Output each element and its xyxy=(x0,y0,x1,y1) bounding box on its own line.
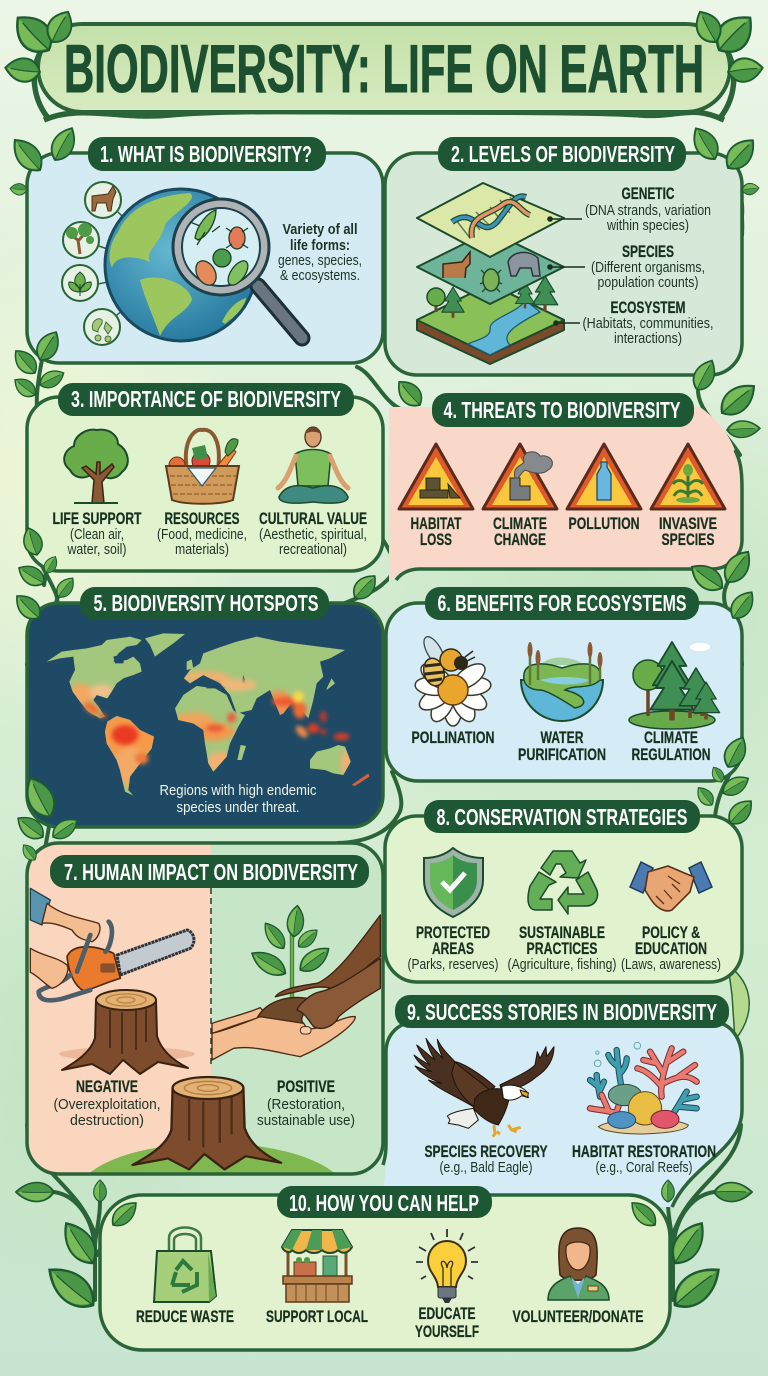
text: map caption: Regions with high endemic xyxy=(160,782,317,799)
split backgrounds xyxy=(28,844,381,1172)
icon: species layer xyxy=(417,231,564,304)
panel card xyxy=(385,153,742,375)
divider xyxy=(210,888,212,1066)
text: benefit labels: PURIFICATION xyxy=(518,746,606,764)
heading xyxy=(80,587,329,620)
text: success labels xyxy=(424,1143,716,1176)
panel card xyxy=(27,153,383,363)
text: threat labels: HABITAT xyxy=(410,514,462,533)
text: threat labels: POLLUTION xyxy=(568,514,640,533)
panel border xyxy=(396,450,742,580)
icon: handshake xyxy=(630,862,712,911)
panel card xyxy=(389,407,742,582)
panel card xyxy=(27,397,383,571)
text: definition: life forms: xyxy=(290,237,350,254)
panel card xyxy=(100,1195,670,1350)
panel 9: success stories in biodiversity xyxy=(380,965,749,1207)
icon: genetic layer xyxy=(417,183,564,257)
text: definition: & ecosystems. xyxy=(280,267,360,284)
heading xyxy=(432,393,694,427)
icon: species circles xyxy=(62,182,130,345)
heading xyxy=(425,587,699,620)
lakes and seas xyxy=(113,653,247,713)
heading: 10. HOW YOU CAN HELP xyxy=(289,1190,479,1216)
text: sustainable practices: (Agriculture, fishing) xyxy=(508,956,616,973)
panel 10: how you can help xyxy=(100,1186,670,1350)
text: negative: destruction) xyxy=(70,1112,144,1129)
panel 6: benefits for ecosystems xyxy=(386,587,742,781)
heading: 2. LEVELS OF BIODIVERSITY xyxy=(451,141,675,167)
icon: seedling in hands xyxy=(212,905,380,1060)
text: positive: sustainable use) xyxy=(257,1112,355,1129)
text: policy and education: (Laws, awareness) xyxy=(621,956,721,973)
text: help labels xyxy=(136,1305,644,1341)
panel 2: levels of biodiversity xyxy=(385,137,742,375)
icon: meditating person xyxy=(278,427,348,503)
panel card xyxy=(27,603,383,827)
text: success labels: SPECIES RECOVERY xyxy=(424,1143,548,1161)
icon: tree xyxy=(64,430,128,503)
text: cultural value: CULTURAL VALUE xyxy=(259,510,367,528)
panel card xyxy=(385,816,742,982)
panel border xyxy=(383,1022,742,1207)
text: resources: (Food, medicine, xyxy=(157,526,247,543)
text: positive: POSITIVE xyxy=(277,1078,335,1096)
icon: coral reef xyxy=(590,1042,697,1134)
text: benefit labels: WATER xyxy=(540,729,584,747)
panel 1: what is biodiversity xyxy=(27,137,383,363)
text: resources: RESOURCES xyxy=(164,510,240,528)
icon: water purification xyxy=(521,642,603,721)
heading xyxy=(277,1186,492,1218)
text: help labels: EDUCATE xyxy=(418,1305,476,1323)
icon: recycling arrows xyxy=(528,851,598,914)
text: level labels: population counts) xyxy=(598,274,698,291)
text: cultural value: (Aesthetic, spiritual, xyxy=(259,526,367,543)
text: policy and education: POLICY & xyxy=(642,924,700,942)
text: level labels: within species) xyxy=(606,217,689,234)
text: definition: Variety of all xyxy=(282,221,358,238)
icon: globe xyxy=(105,189,257,341)
heading xyxy=(58,383,354,416)
panel 5: biodiversity hotspots xyxy=(27,587,383,827)
panel 3: importance of biodiversity xyxy=(27,383,383,571)
text: life support: LIFE SUPPORT xyxy=(52,510,142,528)
heading: 1. WHAT IS BIODIVERSITY? xyxy=(100,141,312,167)
text: threat labels: INVASIVE xyxy=(659,514,717,533)
text: benefit labels: CLIMATE xyxy=(644,729,698,747)
text: resources xyxy=(157,510,247,558)
icon: bee on flower xyxy=(414,634,492,726)
text: resources: materials) xyxy=(175,541,229,558)
heading xyxy=(438,137,686,171)
text: threat labels: CLIMATE xyxy=(493,514,547,533)
heading xyxy=(50,855,369,888)
text: level labels: SPECIES xyxy=(622,243,674,261)
text: protected areas: AREAS xyxy=(432,940,474,958)
microbes in lens xyxy=(190,210,252,289)
text: cultural value xyxy=(259,510,367,558)
text: threat labels: SPECIES xyxy=(662,530,714,549)
text: success labels: (e.g., Bald Eagle) xyxy=(440,1159,532,1176)
panel card xyxy=(380,1022,742,1207)
stump shadow xyxy=(59,1047,195,1061)
text: positive: (Restoration, xyxy=(267,1096,345,1113)
icon: pollution sign xyxy=(567,444,641,509)
panel 4: threats to biodiversity xyxy=(389,393,742,582)
text: help labels: VOLUNTEER/DONATE xyxy=(512,1308,644,1326)
text: protected areas xyxy=(408,924,499,973)
banner leaves left and right xyxy=(4,6,764,84)
layer connector lines xyxy=(548,217,585,325)
text: threat labels xyxy=(410,514,717,549)
text: benefit labels: POLLINATION xyxy=(412,729,494,747)
icon: magnifying glass xyxy=(173,199,302,338)
icon: bald eagle xyxy=(414,1038,554,1137)
icon: market stall xyxy=(282,1230,352,1302)
text: level labels: (Different organisms, xyxy=(591,259,705,276)
text: policy and education xyxy=(621,924,721,973)
text: benefit labels: REGULATION xyxy=(632,746,710,764)
text: protected areas: PROTECTED xyxy=(416,924,490,942)
icon: habitat loss sign xyxy=(399,444,473,509)
icon: volunteer person xyxy=(548,1228,609,1300)
icon: tree stump centre xyxy=(132,1077,281,1169)
icon: climate change sign xyxy=(483,444,557,509)
hotspot glow on land xyxy=(67,671,356,787)
text: sustainable practices: SUSTAINABLE xyxy=(519,924,605,942)
text: map caption xyxy=(160,782,317,816)
text: positive xyxy=(257,1078,355,1129)
heading xyxy=(88,137,326,171)
icon: forest xyxy=(629,642,720,729)
text: help labels: REDUCE WASTE xyxy=(136,1308,234,1326)
text: negative xyxy=(54,1078,160,1129)
icon: recycling bag xyxy=(154,1228,216,1302)
text: level labels: ECOSYSTEM xyxy=(610,299,686,317)
text: sustainable practices xyxy=(508,924,616,973)
heading: 3. IMPORTANCE OF BIODIVERSITY xyxy=(71,386,341,412)
panel 7: human impact on biodiversity xyxy=(25,841,385,1176)
text: level labels: (DNA strands, variation xyxy=(585,202,711,219)
text: life support xyxy=(52,510,142,558)
title banner xyxy=(4,6,764,120)
text: definition xyxy=(278,221,362,284)
icon: shield xyxy=(424,848,483,917)
text: help labels: SUPPORT LOCAL xyxy=(266,1308,368,1326)
heading xyxy=(395,995,729,1028)
text: threat labels: CHANGE xyxy=(494,530,546,549)
text: benefit labels xyxy=(412,729,710,764)
icon: light bulb xyxy=(416,1229,478,1303)
text: cultural value: recreational) xyxy=(279,541,347,558)
vines connecting panels xyxy=(27,155,742,1300)
text: success labels: HABITAT RESTORATION xyxy=(572,1143,716,1161)
text: help labels: YOURSELF xyxy=(415,1323,479,1341)
text: policy and education: EDUCATION xyxy=(635,940,707,958)
heading: 5. BIODIVERSITY HOTSPOTS xyxy=(94,590,318,616)
text: level labels xyxy=(582,185,714,347)
panel border xyxy=(27,843,383,1174)
text: life support: water, soil) xyxy=(67,541,126,558)
text: success labels: (e.g., Coral Reefs) xyxy=(596,1159,692,1176)
decorative side leaf xyxy=(728,965,749,1040)
text: level labels: GENETIC xyxy=(622,185,675,203)
heading xyxy=(424,800,700,833)
panel card xyxy=(386,603,742,781)
text: negative: NEGATIVE xyxy=(76,1078,138,1096)
banner shape xyxy=(38,24,730,112)
hotspot cores xyxy=(82,691,350,764)
icon: tree stump negative xyxy=(62,990,188,1074)
icon: ecosystem layer xyxy=(417,276,564,364)
text: level labels: interactions) xyxy=(614,330,682,347)
text: level labels: (Habitats, communities, xyxy=(582,315,714,332)
heading: 7. HUMAN IMPACT ON BIODIVERSITY xyxy=(64,859,358,885)
icon: basket of resources xyxy=(166,430,239,504)
text: protected areas: (Parks, reserves) xyxy=(408,956,499,973)
icon: chainsaw and hands xyxy=(30,888,194,1000)
icon: invasive species sign xyxy=(651,444,725,509)
text: life support: (Clean air, xyxy=(70,526,124,543)
panel 8: conservation strategies xyxy=(385,800,742,982)
world hotspot map xyxy=(47,633,369,796)
text: threat labels: LOSS xyxy=(420,530,452,549)
text: sustainable practices: PRACTICES xyxy=(526,940,598,958)
text: definition: genes, species, xyxy=(278,252,362,269)
text: negative: (Overexploitation, xyxy=(54,1096,160,1113)
vine under banner xyxy=(34,44,734,120)
text: map caption: species under threat. xyxy=(176,799,300,816)
